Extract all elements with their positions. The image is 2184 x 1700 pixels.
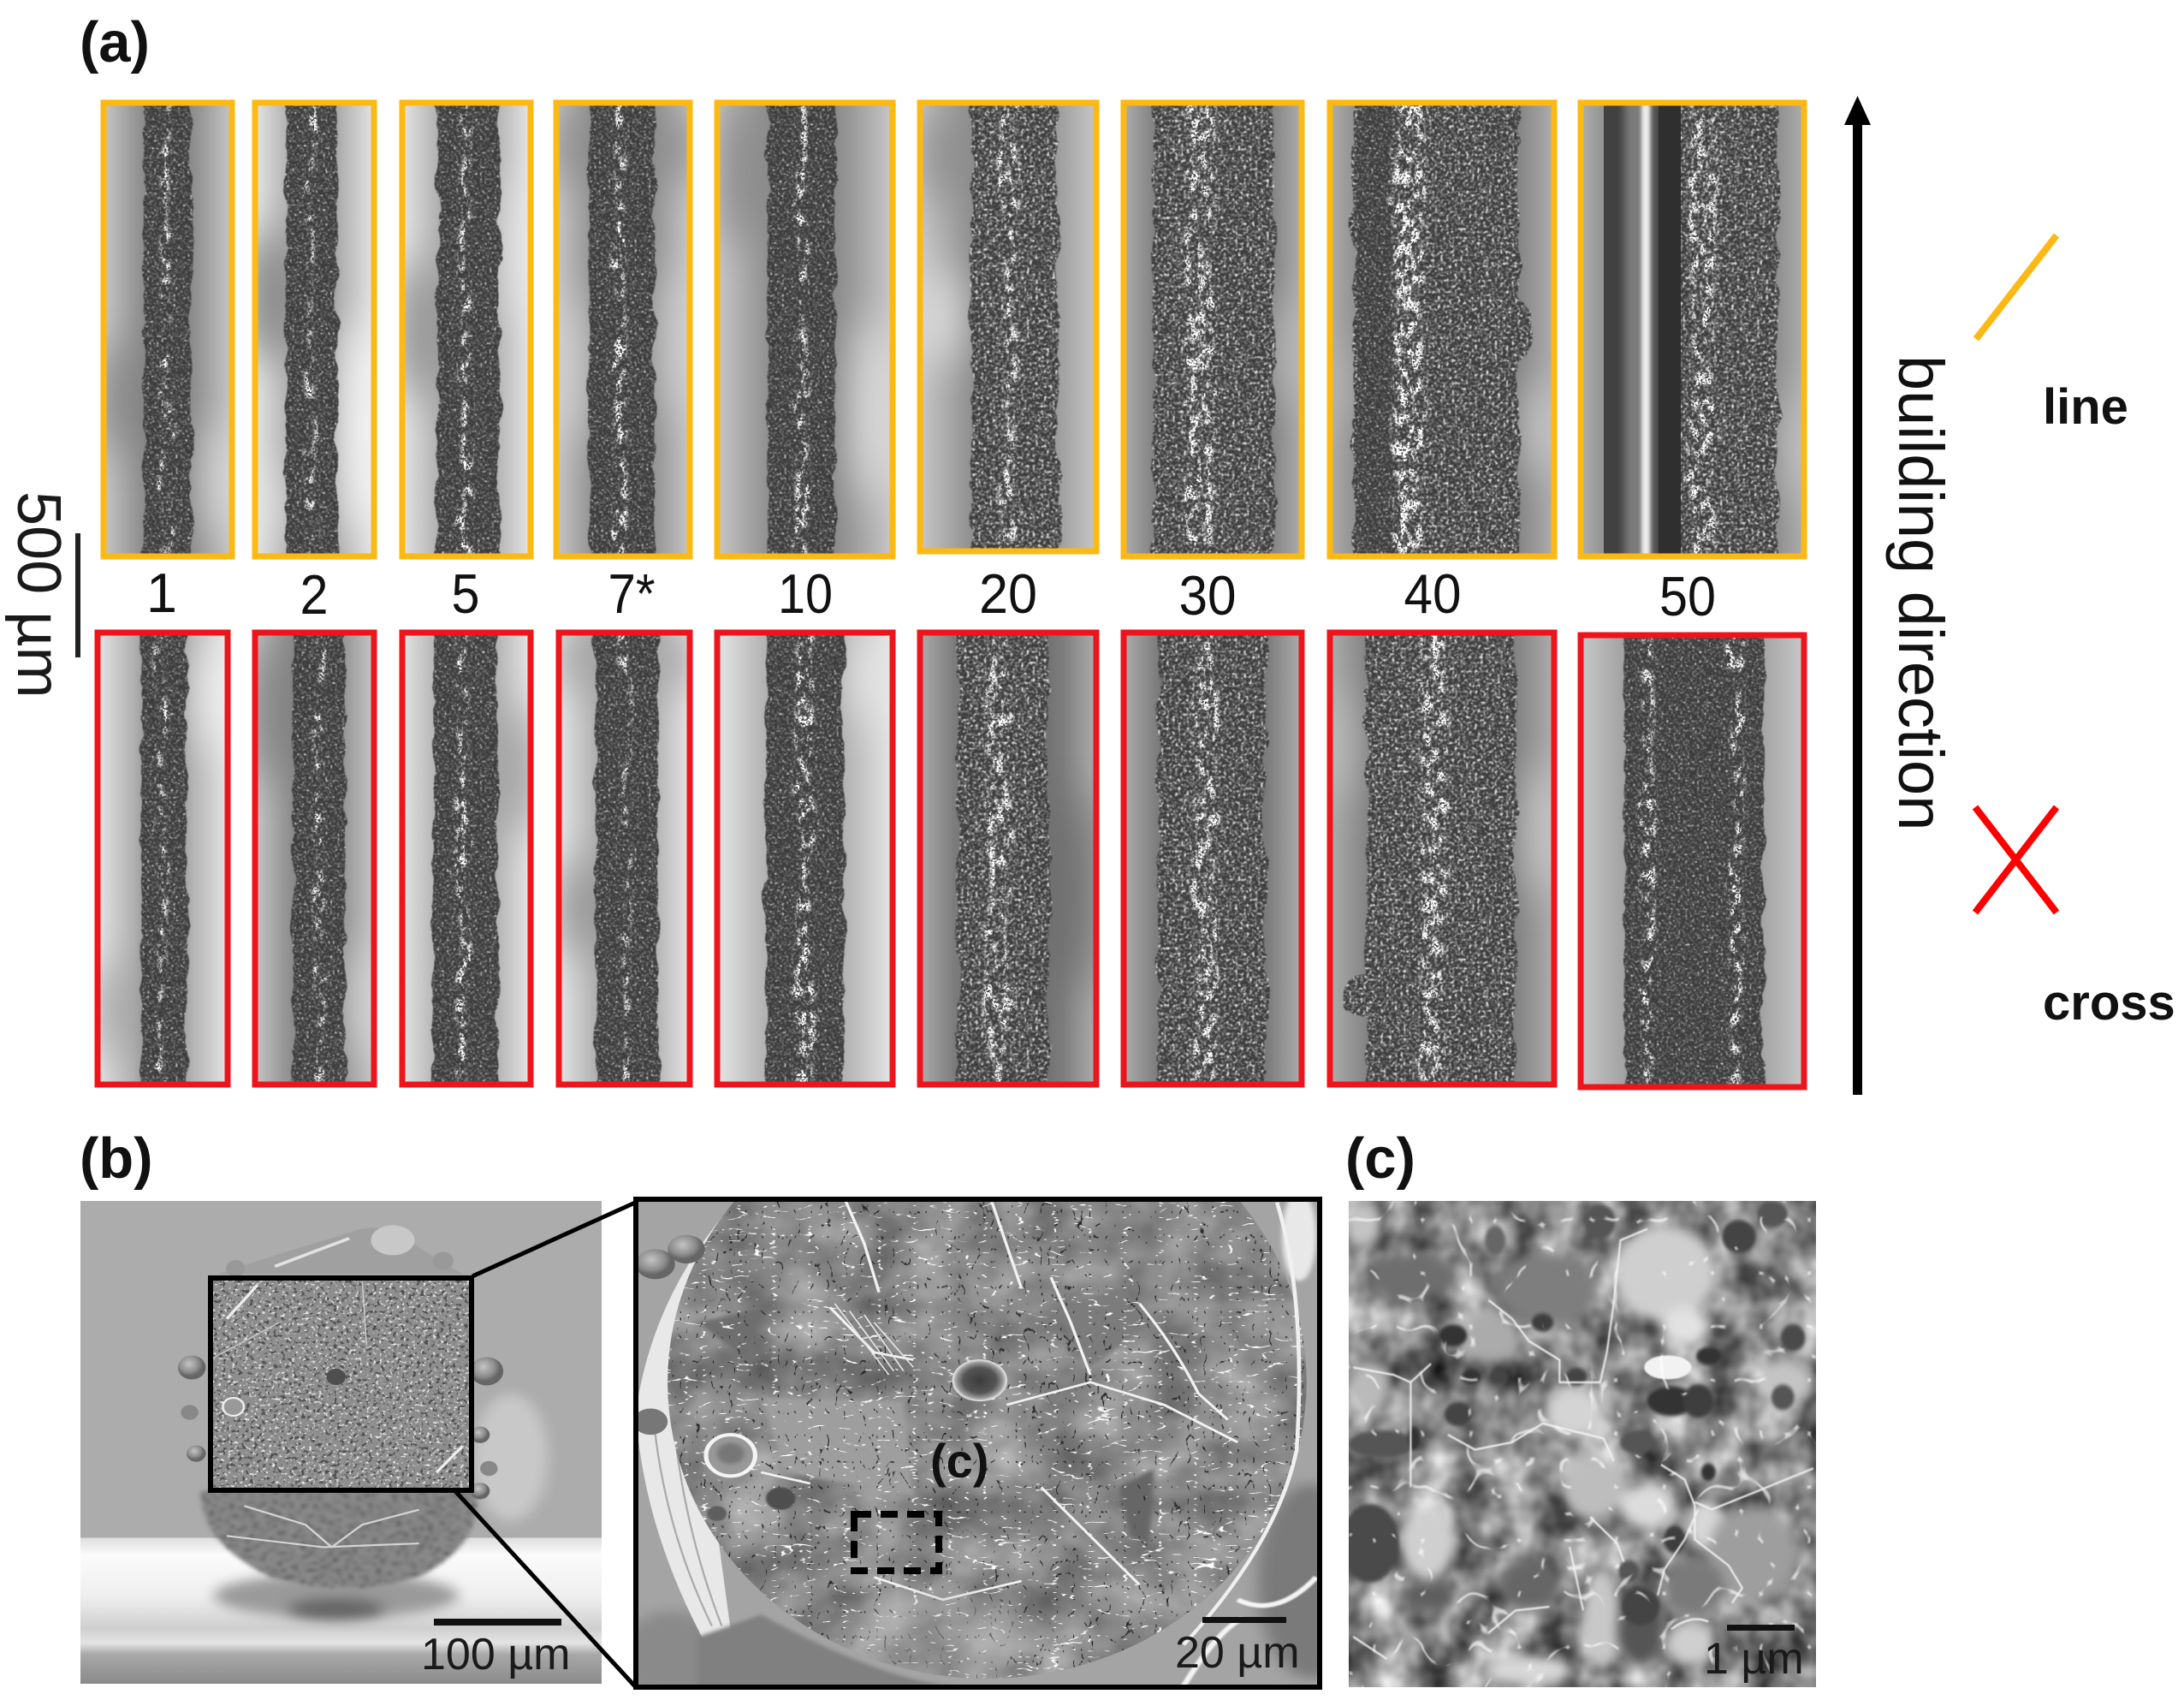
zoom connector lines xyxy=(455,1203,635,1686)
panel: line sample 1 xyxy=(101,86,234,574)
scale bar: 100 µm: 100 µm xyxy=(421,1630,570,1679)
panel: line sample 20 xyxy=(917,86,1099,574)
legend: line xyxy=(1976,235,2128,435)
arrow: building direction xyxy=(1844,96,1871,1095)
scale bar: 20 µm: 20 µm xyxy=(1175,1628,1300,1678)
sample numbers: 50 xyxy=(1659,565,1716,627)
dashed region box xyxy=(854,1514,939,1571)
panel: line sample 5 xyxy=(400,86,533,574)
panel: line sample 2 xyxy=(250,86,383,574)
sample numbers: 5 xyxy=(452,562,479,625)
heading: panel (b) label: (b) xyxy=(80,1126,153,1191)
panel: cross sample 2 xyxy=(252,616,377,1104)
panel: cross sample 40 xyxy=(1327,616,1557,1104)
panel: cross sample 5 xyxy=(400,616,533,1104)
panel: cross sample 50 xyxy=(1578,616,1807,1104)
heading: panel (c) label: (c) xyxy=(1345,1126,1415,1191)
heading: panel (a) label: (a) xyxy=(80,10,150,74)
sample numbers: 7* xyxy=(608,562,656,625)
panel: line sample 10 xyxy=(715,86,895,574)
scale bar: 1 µm: 1 µm xyxy=(1704,1634,1804,1684)
legend: line: line xyxy=(2043,379,2128,435)
sample numbers: 1 xyxy=(146,562,177,624)
scale bar: 500 µm: 500 µm xyxy=(4,491,73,698)
panel: cross sample 7* xyxy=(556,616,692,1104)
sample numbers: 40 xyxy=(1404,562,1462,625)
panel: line sample 30 xyxy=(1121,86,1304,574)
panel: cross sample 30 xyxy=(1121,616,1304,1104)
panel: cross sample 20 xyxy=(917,616,1099,1104)
legend: cross: cross xyxy=(2043,975,2175,1031)
panel: line sample 50 xyxy=(1578,86,1807,574)
sample numbers xyxy=(146,562,1716,627)
image: SEM dimple microstructure xyxy=(1341,1201,1816,1687)
sample numbers: 2 xyxy=(300,563,329,626)
panel: line sample 7* xyxy=(554,86,692,574)
legend: cross xyxy=(1975,807,2175,1031)
image: SEM fracture surface inset xyxy=(633,1197,1322,1690)
label: building direction: building direction xyxy=(1885,355,1956,830)
sample numbers: 10 xyxy=(778,562,833,625)
panel: cross sample 10 xyxy=(715,616,895,1104)
sample numbers: 20 xyxy=(979,562,1037,625)
panel: line sample 40 xyxy=(1327,86,1557,574)
image: SEM overview of strut xyxy=(80,1201,602,1684)
panel: cross sample 1 xyxy=(95,616,230,1104)
label: (c) region marker: (c) xyxy=(930,1434,988,1488)
sample numbers: 30 xyxy=(1179,564,1236,627)
